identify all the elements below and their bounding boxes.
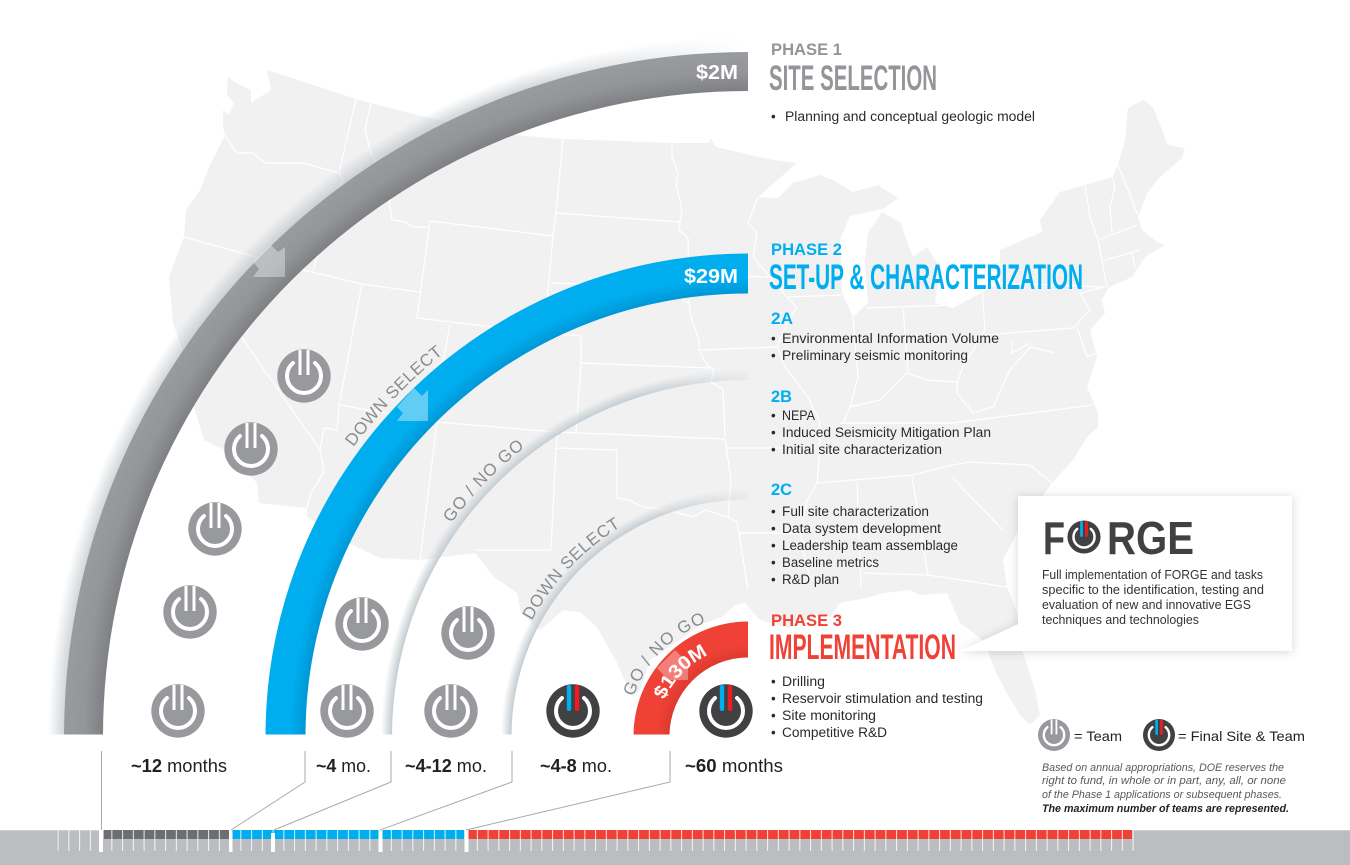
legend [1038,719,1305,751]
phase 3 heading and list: • [771,725,776,740]
arrow on phase 1 arc [253,245,285,277]
phase 2C list: • [771,555,776,570]
phase 2A list: • [771,348,776,363]
phase 2 heading: SET-UP & CHARACTERIZATION [769,258,1083,297]
FORGE description: techniques and technologies [1042,613,1199,627]
team icons: phase 2 continuation [424,606,495,738]
curved label: go no go: GO / NO GO [444,440,522,520]
disclaimer note: The maximum number of teams are represented. [1042,803,1289,815]
FORGE logo: RGE [1107,512,1194,564]
duration label: 4-8 mo: ~4-8 mo. [540,756,612,776]
phase 3 heading and list: Site monitoring [782,708,876,723]
team icons: phase 1 [151,349,331,738]
duration label: 60 months: ~60 months [685,756,783,776]
phase 2 heading [769,241,1083,297]
timeline bar [0,830,1350,865]
phase 2C list: • [771,572,776,587]
phase 2C list: R&D plan [782,572,839,587]
arrow on phase 3 arc [657,650,688,680]
phase 1 text [769,41,1035,124]
phase 2A list: • [771,331,776,346]
FORGE logo: F [1043,512,1065,564]
map of the United States [169,70,1185,725]
curved label: down select second: DOWN SELECT [522,517,617,620]
phase 2A list: 2A [771,309,793,328]
phase 3 heading and list: Reservoir stimulation and testing [782,691,983,706]
phase 3 heading and list: IMPLEMENTATION [769,628,956,667]
phase 2C list: Baseline metrics [782,555,879,570]
curved label: down select: DOWN SELECT [345,344,440,446]
funding label $2M: $2M [696,62,738,84]
phase 2C list: Full site characterization [782,504,929,519]
FORGE description: specific to the identification, testing and [1042,583,1264,597]
disclaimer note: Based on annual appropriations, DOE reserves the [1042,762,1284,774]
FORGE description: Full implementation of FORGE and tasks [1042,568,1263,582]
phase 2A list: Environmental Information Volume [782,331,999,346]
phase 2B list: Initial site characterization [782,442,942,457]
phase 1 text: PHASE 1 [771,41,842,59]
duration label: 4 mo: ~4 mo. [316,756,371,776]
legend: = Team [1074,728,1122,744]
phase 3 heading and list: • [771,708,776,723]
disclaimer note: of the Phase 1 applications or subsequent phases. [1042,789,1282,801]
phase 1 text: SITE SELECTION [769,59,937,98]
phase 2C list: Leadership team assemblage [782,538,958,553]
phase 2C list: • [771,521,776,536]
phase 2B list: Induced Seismicity Mitigation Plan [782,425,991,440]
curved label: go no go second: GO / NO GO [624,614,704,694]
phase 3 heading and list: • [771,674,776,689]
phase 2C list [771,480,958,587]
phase 3 heading and list [769,612,983,740]
arrow on phase 2 arc [397,388,428,421]
phase 2C list: • [771,538,776,553]
FORGE description [1042,568,1264,627]
funding label $130M: $130M [654,644,707,698]
phase 1 text: Planning and conceptual geologic model [785,109,1035,124]
disclaimer note [1042,762,1289,815]
phase 2A list: Preliminary seismic monitoring [782,348,968,363]
final site icon two [699,684,753,738]
duration label: 12 months: ~12 months [131,756,227,776]
phase 3 arc [634,622,748,736]
phase 3 heading and list: • [771,691,776,706]
disclaimer note: right to fund, in whole or in part, any, all, or none [1042,775,1286,787]
team icons: phase 2 [320,597,389,738]
final site icon one [546,684,600,738]
phase 2A list [771,309,999,363]
phase 2B list: • [771,442,776,457]
phase 3 heading and list: PHASE 3 [771,612,842,630]
phase 2B list: 2B [771,387,792,406]
phase 2B list: • [771,425,776,440]
phase 2 arc [266,254,748,736]
legend: = Final Site & Team [1178,728,1305,744]
phase 2C list: Data system development [782,521,941,536]
phase 3 heading and list: Competitive R&D [782,725,887,740]
phase 2B list [771,387,991,457]
funding label $29M: $29M [684,266,738,288]
arc shadows and go / no go curves [48,36,748,736]
phase 2B list: • [771,408,776,423]
phase 2C list: 2C [771,480,792,499]
phase 2 heading: PHASE 2 [771,241,842,259]
timeline leader lines [102,751,670,830]
FORGE logo [1043,512,1194,564]
phase 3 heading and list: Drilling [782,674,825,689]
phase 2B list: NEPA [782,408,815,423]
duration label: 4-12 mo: ~4-12 mo. [405,756,487,776]
phase 1 arc [64,52,748,736]
FORGE callout panel [960,496,1292,651]
phase 2C list: • [771,504,776,519]
FORGE description: evaluation of new and innovative EGS [1042,598,1251,612]
phase 1 text: • [771,109,776,124]
